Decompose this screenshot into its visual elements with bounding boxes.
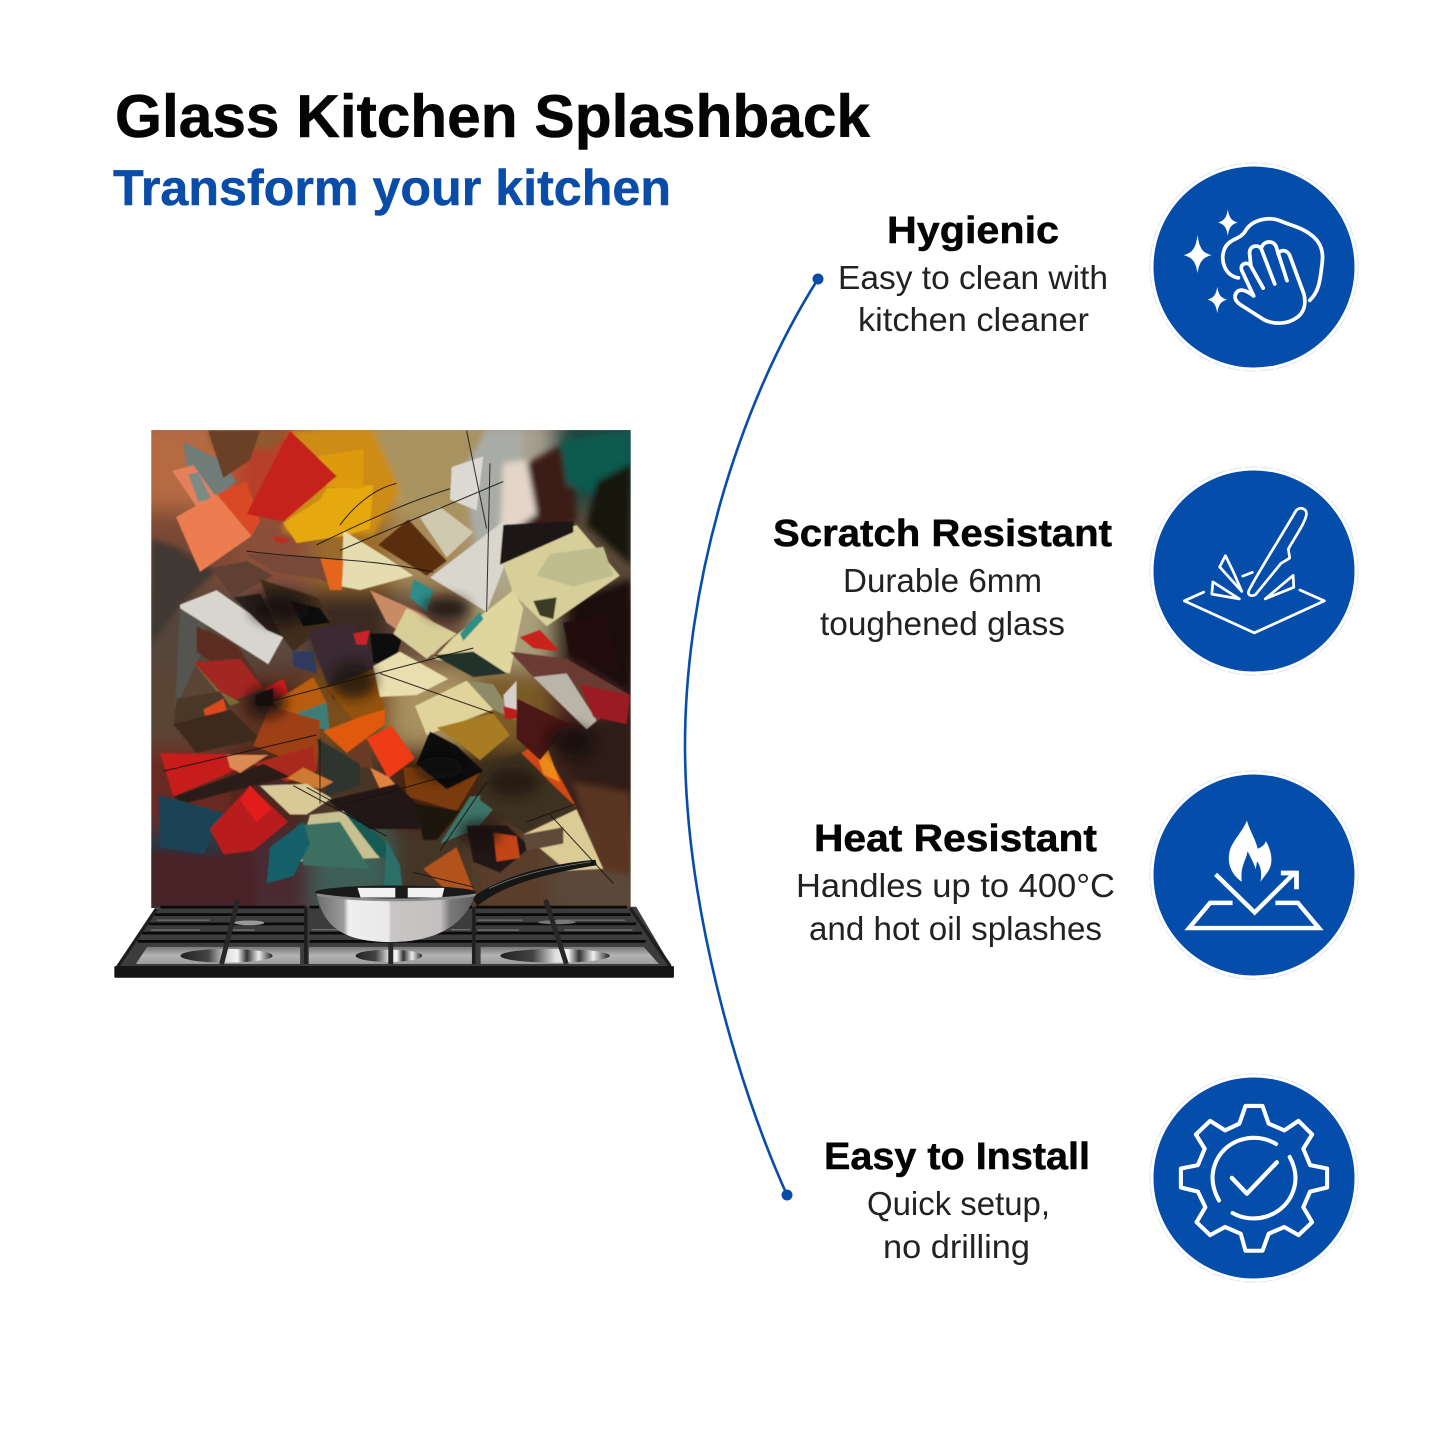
pan supports bbox=[222, 900, 566, 964]
top left shards bbox=[183, 442, 237, 496]
connector curve bbox=[685, 274, 824, 1200]
connector dot top bbox=[812, 274, 824, 284]
front edge bbox=[114, 966, 674, 978]
icon: knife scratching glass bbox=[1150, 467, 1358, 675]
feature text: heat resistant: Handles up to 400°C bbox=[796, 867, 1115, 904]
soft dark washes bbox=[247, 592, 593, 844]
centre cream bbox=[370, 590, 450, 655]
feature text: scratch resistant: Scratch Resistant bbox=[773, 513, 1112, 555]
feature text: easy to install: Quick setup, bbox=[867, 1185, 1050, 1222]
feature text: hygienic: Hygienic bbox=[887, 210, 1059, 252]
burners bbox=[180, 920, 610, 963]
icon: gear with check bbox=[1150, 1074, 1358, 1282]
feature text: scratch resistant: Durable 6mm bbox=[843, 562, 1042, 599]
connector dot bottom bbox=[782, 1190, 792, 1200]
pan bowl bbox=[317, 894, 475, 942]
hob body bbox=[115, 907, 672, 967]
steel panels bbox=[136, 947, 659, 964]
pan rim bbox=[315, 885, 476, 899]
feature text: easy to install: no drilling bbox=[883, 1228, 1030, 1265]
icon: flame over glass bbox=[1150, 771, 1358, 979]
thin lines bbox=[163, 431, 613, 887]
central top cream and brown bbox=[342, 530, 413, 590]
subtitle: Transform your kitchen bbox=[113, 160, 671, 216]
feature text: hygienic bbox=[838, 210, 1108, 338]
feature text: scratch resistant bbox=[773, 513, 1112, 642]
feature text: easy to install: Easy to Install bbox=[824, 1136, 1090, 1178]
pan handle bbox=[472, 860, 597, 906]
title: Glass Kitchen Splashback bbox=[115, 83, 871, 150]
mid-left bbox=[247, 554, 343, 590]
feature text: hygienic: kitchen cleaner bbox=[858, 301, 1089, 338]
glass splashback abstract painting bbox=[151, 430, 631, 908]
icon: hand wiping with sparkles bbox=[1150, 163, 1358, 371]
feature text: scratch resistant: toughened glass bbox=[820, 605, 1065, 642]
feature text: heat resistant: Heat Resistant bbox=[814, 818, 1097, 860]
feature text: heat resistant: and hot oil splashes bbox=[809, 910, 1102, 947]
feature text: easy to install bbox=[824, 1136, 1090, 1265]
grates bbox=[138, 907, 646, 941]
feature text: hygienic: Easy to clean with bbox=[838, 259, 1108, 296]
gas hob with pan bbox=[114, 860, 674, 978]
feature text: heat resistant bbox=[796, 818, 1115, 947]
